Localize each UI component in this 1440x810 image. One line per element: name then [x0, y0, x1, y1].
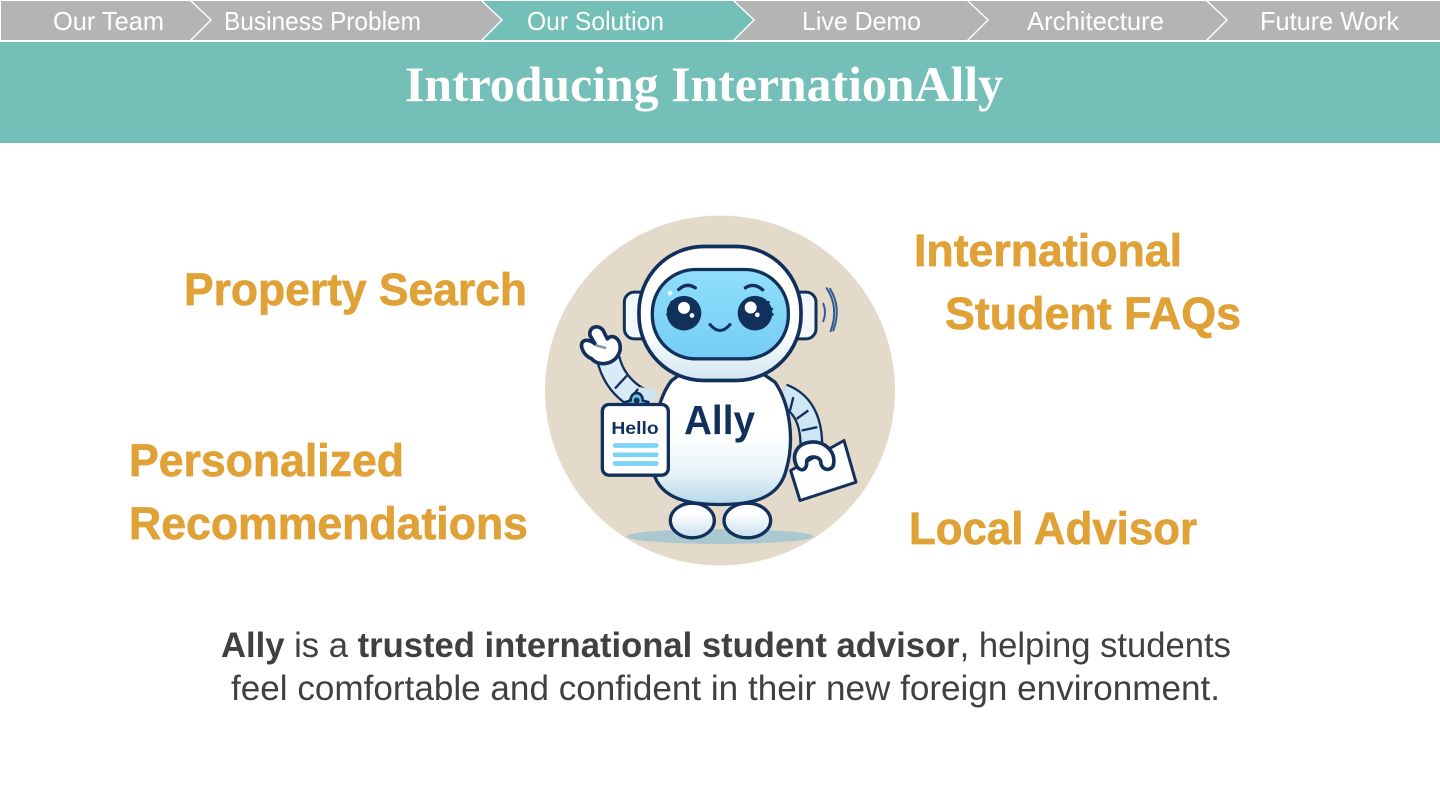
navigation bar: [1, 1, 1440, 40]
feature label: Property Search: Property Search: [184, 264, 527, 315]
description text: [221, 626, 1231, 708]
right arm: [783, 395, 817, 444]
feature label: International Student FAQs: Student FAQs: [945, 288, 1241, 339]
body: [652, 367, 790, 504]
ears: [624, 292, 816, 339]
nav step: Our Team: [1, 1, 210, 40]
nav step: Architecture: [969, 1, 1226, 40]
nav step: Live Demo: Live Demo: [802, 6, 921, 36]
ground shadow: [626, 529, 814, 544]
description text: feel comfortable and confident in their new foreign environment.: [231, 669, 1220, 708]
right hand: [795, 442, 834, 470]
nav step: Business Problem: [192, 1, 501, 40]
name badge: [602, 393, 668, 475]
description text: Ally is a trusted international student advisor, helping students: [221, 626, 1231, 665]
visor: [652, 269, 788, 359]
nav step: Our Solution (active): [483, 1, 753, 40]
nav step: Architecture: Architecture: [1027, 6, 1164, 36]
nav step: Future Work: [1208, 1, 1440, 40]
head: [639, 246, 801, 380]
name badge: Hello: [611, 418, 659, 438]
nav step: Our Team: Our Team: [53, 6, 164, 36]
face: [667, 285, 773, 330]
paper sheet: [791, 440, 856, 500]
feet: [670, 503, 771, 538]
title banner: [0, 42, 1440, 143]
beige circle background: [545, 215, 895, 565]
feature label: International Student FAQs: International: [914, 225, 1182, 276]
nav step: Future Work: Future Work: [1260, 6, 1400, 36]
nav step: Business Problem: Business Problem: [224, 6, 421, 36]
title: Introducing InternationAlly: [405, 56, 1003, 112]
left arm: [608, 359, 657, 410]
feature label: Local Advisor: Local Advisor: [909, 503, 1197, 554]
nav step: Live Demo: [735, 1, 987, 40]
feature label: Personalized Recommendations: Recommendations: [129, 498, 528, 549]
waving hand: [582, 327, 620, 364]
sound waves: [823, 288, 837, 331]
feature label: Personalized Recommendations: Personalized: [129, 435, 404, 486]
nav step: Our Solution (active): Our Solution: [527, 6, 664, 36]
ally chest text: Ally: [684, 397, 755, 443]
feature label: International Student FAQs: [914, 225, 1241, 339]
robot mascot illustration: [545, 215, 895, 565]
feature label: Personalized Recommendations: [129, 435, 528, 549]
